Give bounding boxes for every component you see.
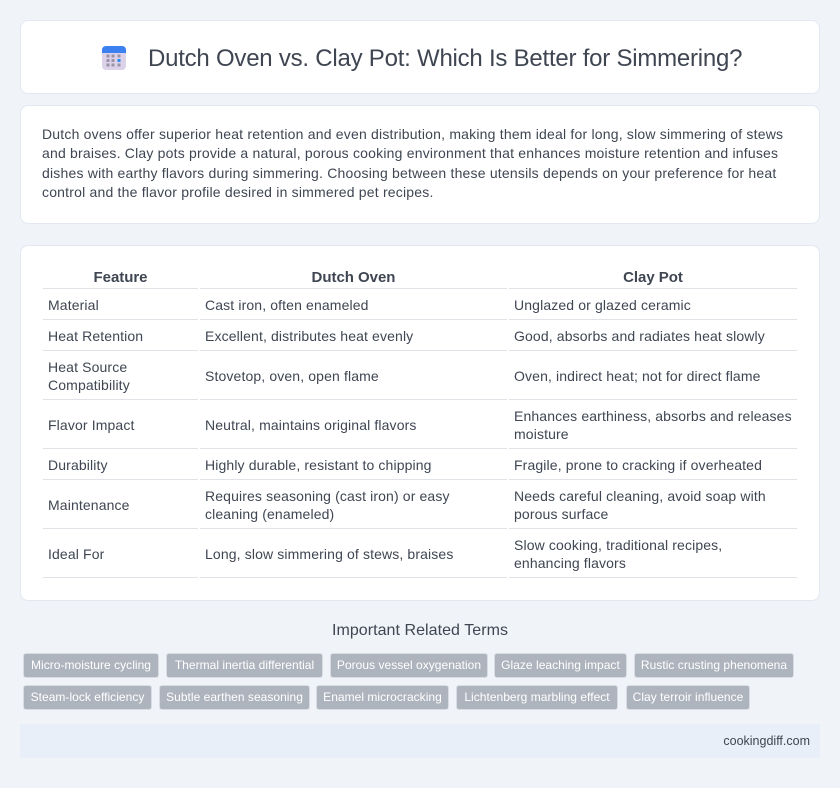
comparison table: Highly durable, resistant to chipping — [205, 457, 432, 473]
related terms tags: Porous vessel oxygenation — [337, 658, 481, 672]
comparison table: Compatibility — [48, 377, 130, 393]
footer bar — [20, 724, 820, 758]
footer source: cookingdiff.com — [723, 734, 810, 748]
comparison table: Slow cooking, traditional recipes, — [514, 537, 722, 553]
comparison table: Cast iron, often enameled — [205, 297, 369, 313]
comparison table: Needs careful cleaning, avoid soap with — [514, 488, 766, 504]
comparison table: Flavor Impact — [48, 417, 134, 433]
related terms tags: Micro-moisture cycling — [31, 658, 151, 672]
comparison table: Maintenance — [48, 497, 130, 513]
related terms heading: Important Related Terms — [332, 622, 508, 639]
comparison table: moisture — [514, 426, 569, 442]
intro text panel — [20, 105, 820, 224]
intro paragraph — [42, 126, 783, 200]
comparison table: Ideal For — [48, 546, 104, 562]
title: Dutch Oven vs. Clay Pot: Which Is Better for Simmering? — [148, 45, 742, 72]
comparison table: Stovetop, oven, open flame — [205, 368, 379, 384]
comparison table: porous surface — [514, 506, 608, 522]
related terms tags: Subtle earthen seasoning — [166, 690, 303, 704]
comparison table: Clay Pot — [623, 269, 683, 286]
comparison table: cleaning (enameled) — [205, 506, 334, 522]
comparison table: Durability — [48, 457, 108, 473]
comparison table: Dutch Oven — [312, 269, 395, 286]
intro paragraph: control and the flavor profile desired in simmered pet recipes. — [42, 184, 434, 200]
related terms tags: Thermal inertia differential — [175, 658, 314, 672]
related terms tags — [23, 653, 794, 710]
comparison table: Enhances earthiness, absorbs and releases — [514, 408, 792, 424]
comparison table: Long, slow simmering of stews, braises — [205, 546, 453, 562]
comparison table: Heat Source — [48, 359, 127, 375]
related terms tags: Clay terroir influence — [633, 690, 743, 704]
related terms tags: Enamel microcracking — [323, 690, 442, 704]
comparison table — [43, 269, 797, 578]
comparison table: Unglazed or glazed ceramic — [514, 297, 691, 313]
related terms tags: Lichtenberg marbling effect — [464, 690, 610, 704]
related terms tags: Steam-lock efficiency — [31, 690, 144, 704]
related terms tags: Glaze leaching impact — [501, 658, 620, 672]
comparison table panel — [20, 245, 820, 601]
comparison table: enhancing flavors — [514, 555, 626, 571]
related terms tags: Rustic crusting phenomena — [641, 658, 787, 672]
comparison table: Requires seasoning (cast iron) or easy — [205, 488, 450, 504]
comparison table: Material — [48, 297, 99, 313]
intro paragraph: and braises. Clay pots provide a natural, porous cooking environment that enhances moisture retention and infuses — [42, 145, 778, 161]
intro paragraph: dishes with earthy flavors during simmering. Choosing between these utensils depends on your preference for heat — [42, 165, 776, 181]
icon: calendar — [102, 46, 126, 70]
comparison table: Heat Retention — [48, 328, 143, 344]
comparison table: Feature — [94, 269, 147, 286]
comparison table: Neutral, maintains original flavors — [205, 417, 417, 433]
header panel — [20, 20, 820, 94]
comparison table: Oven, indirect heat; not for direct flame — [514, 368, 761, 384]
intro paragraph: Dutch ovens offer superior heat retention and even distribution, making them ideal for long, slow simmering of stews — [42, 126, 783, 142]
comparison table: Excellent, distributes heat evenly — [205, 328, 413, 344]
comparison table: Good, absorbs and radiates heat slowly — [514, 328, 765, 344]
comparison table: Fragile, prone to cracking if overheated — [514, 457, 762, 473]
